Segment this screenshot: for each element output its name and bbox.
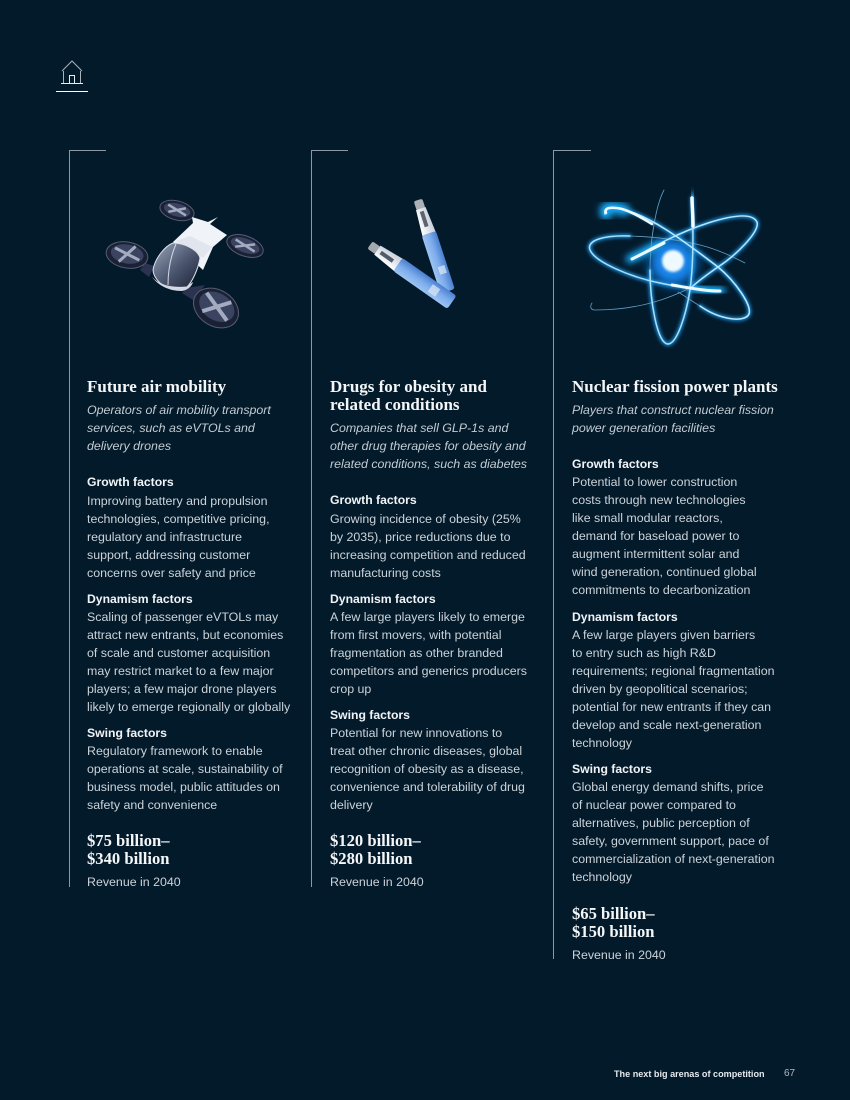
footer title: The next big arenas of competition xyxy=(614,1069,765,1079)
growth text: manufacturing costs xyxy=(330,566,441,580)
dynamism text: fragmentation as other branded xyxy=(330,646,503,660)
growth text: costs through new technologies xyxy=(572,493,746,507)
revenue value xyxy=(330,831,421,868)
swing text: Global energy demand shifts, price xyxy=(572,780,763,794)
swing text: operations at scale, sustainability of xyxy=(87,762,283,776)
swing text: alternatives, public perception of xyxy=(572,816,750,830)
swing text: Potential for new innovations to xyxy=(330,726,502,740)
revenue value: $120 billion– xyxy=(330,831,421,850)
swing text: recognition of obesity as a disease, xyxy=(330,762,524,776)
growth text: regulatory and infrastructure xyxy=(87,530,242,544)
growth text: by 2035), price reductions due to xyxy=(330,530,510,544)
revenue value: $65 billion– xyxy=(572,904,655,923)
revenue value: $150 billion xyxy=(572,922,655,941)
swing text: safety, government support, pace of xyxy=(572,834,769,848)
description: Companies that sell GLP-1s and xyxy=(330,421,508,435)
description: power generation facilities xyxy=(572,421,715,435)
swing factors: Swing factors xyxy=(330,708,410,722)
revenue value xyxy=(87,831,170,868)
column: Nuclear fission xyxy=(572,377,778,962)
growth text xyxy=(87,494,270,580)
description: delivery drones xyxy=(87,439,171,453)
swing factors: Swing factors xyxy=(572,762,652,776)
swing factors: Swing factors xyxy=(87,726,167,740)
revenue label: Revenue in 2040 xyxy=(572,948,666,962)
dynamism text: requirements; regional fragmentation xyxy=(572,664,774,678)
dynamism text: technology xyxy=(572,736,632,750)
dynamism factors: Dynamism factors xyxy=(572,610,678,624)
swing text: delivery xyxy=(330,798,373,812)
dynamism text: potential for new entrants if they can xyxy=(572,700,771,714)
dynamism text: Scaling of passenger eVTOLs may xyxy=(87,610,278,624)
dynamism text: develop and scale next-generation xyxy=(572,718,761,732)
growth text xyxy=(572,475,757,597)
dynamism text: players; a few major drone players xyxy=(87,682,276,696)
dynamism text: driven by geopolitical scenarios; xyxy=(572,682,748,696)
page number: 67 xyxy=(784,1068,795,1079)
title: Future air mobility xyxy=(87,377,226,396)
description: services, such as eVTOLs and xyxy=(87,421,255,435)
panel frame: air mobility xyxy=(69,150,106,887)
growth text: demand for baseload power to xyxy=(572,529,739,543)
icon: home xyxy=(56,60,88,92)
dynamism text: attract new entrants, but economies xyxy=(87,628,283,642)
dynamism text xyxy=(330,610,527,696)
swing text: treat other chronic diseases, global xyxy=(330,744,522,758)
growth factors: Growth factors xyxy=(572,457,659,471)
growth text: like small modular reactors, xyxy=(572,511,723,525)
description xyxy=(572,403,774,435)
growth text: concerns over safety and price xyxy=(87,566,256,580)
image: injection pens xyxy=(365,198,457,309)
growth text: commitments to decarbonization xyxy=(572,583,750,597)
swing text: technology xyxy=(572,870,632,884)
growth text: wind generation, continued global xyxy=(572,565,757,579)
description: related conditions, such as diabetes xyxy=(330,457,527,471)
swing text: safety and convenience xyxy=(87,798,217,812)
dynamism text: A few large players likely to emerge xyxy=(330,610,525,624)
revenue value: $75 billion– xyxy=(87,831,170,850)
growth text xyxy=(330,512,526,580)
dynamism text: crop up xyxy=(330,682,371,696)
revenue value xyxy=(572,904,655,941)
swing text: business model, public attitudes on xyxy=(87,780,280,794)
title: related conditions xyxy=(330,395,460,414)
swing text: commercialization of next-generation xyxy=(572,852,774,866)
panel frame: drugs xyxy=(311,150,348,887)
revenue label: Revenue in 2040 xyxy=(330,875,424,889)
growth text: augment intermittent solar and xyxy=(572,547,739,561)
swing text xyxy=(87,744,283,812)
image: glowing atom xyxy=(589,190,757,344)
growth factors: Growth factors xyxy=(87,475,174,489)
description xyxy=(87,403,272,453)
title: Nuclear fission power plants xyxy=(572,377,778,396)
description: Operators of air mobility transport xyxy=(87,403,271,417)
growth text: Improving battery and propulsion xyxy=(87,494,267,508)
image: air taxi drone xyxy=(104,197,266,336)
swing text: of nuclear power compared to xyxy=(572,798,736,812)
panel frame: nuclear xyxy=(553,150,591,959)
revenue label: Revenue in 2040 xyxy=(87,875,181,889)
swing text xyxy=(330,726,525,812)
growth factors: Growth factors xyxy=(330,493,417,507)
growth text: technologies, competitive pricing, xyxy=(87,512,270,526)
title xyxy=(330,377,487,414)
revenue value: $280 billion xyxy=(330,849,413,868)
dynamism text: from first movers, with potential xyxy=(330,628,501,642)
description xyxy=(330,421,527,471)
swing text: convenience and tolerability of drug xyxy=(330,780,525,794)
growth text: Potential to lower construction xyxy=(572,475,737,489)
description: Players that construct nuclear fission xyxy=(572,403,774,417)
revenue value: $340 billion xyxy=(87,849,170,868)
growth text: support, addressing customer xyxy=(87,548,250,562)
dynamism text: likely to emerge regionally or globally xyxy=(87,700,290,714)
illustrations xyxy=(106,188,762,348)
dynamism text: may restrict market to a few major xyxy=(87,664,274,678)
dynamism factors: Dynamism factors xyxy=(330,592,436,606)
growth text: Growing incidence of obesity (25% xyxy=(330,512,521,526)
dynamism text: to entry such as high R&D xyxy=(572,646,716,660)
swing text: Regulatory framework to enable xyxy=(87,744,263,758)
dynamism text xyxy=(572,628,774,750)
dynamism text: competitors and generics producers xyxy=(330,664,527,678)
growth text: increasing competition and reduced xyxy=(330,548,526,562)
dynamism text: of scale and customer acquisition xyxy=(87,646,270,660)
dynamism factors: Dynamism factors xyxy=(87,592,193,606)
description: other drug therapies for obesity and xyxy=(330,439,526,453)
dynamism text: A few large players given barriers xyxy=(572,628,755,642)
swing text xyxy=(572,780,774,884)
column: Drugs for obesity xyxy=(330,377,527,889)
column: Future air mobility xyxy=(87,377,290,889)
title: Drugs for obesity and xyxy=(330,377,487,396)
dynamism text xyxy=(87,610,290,714)
